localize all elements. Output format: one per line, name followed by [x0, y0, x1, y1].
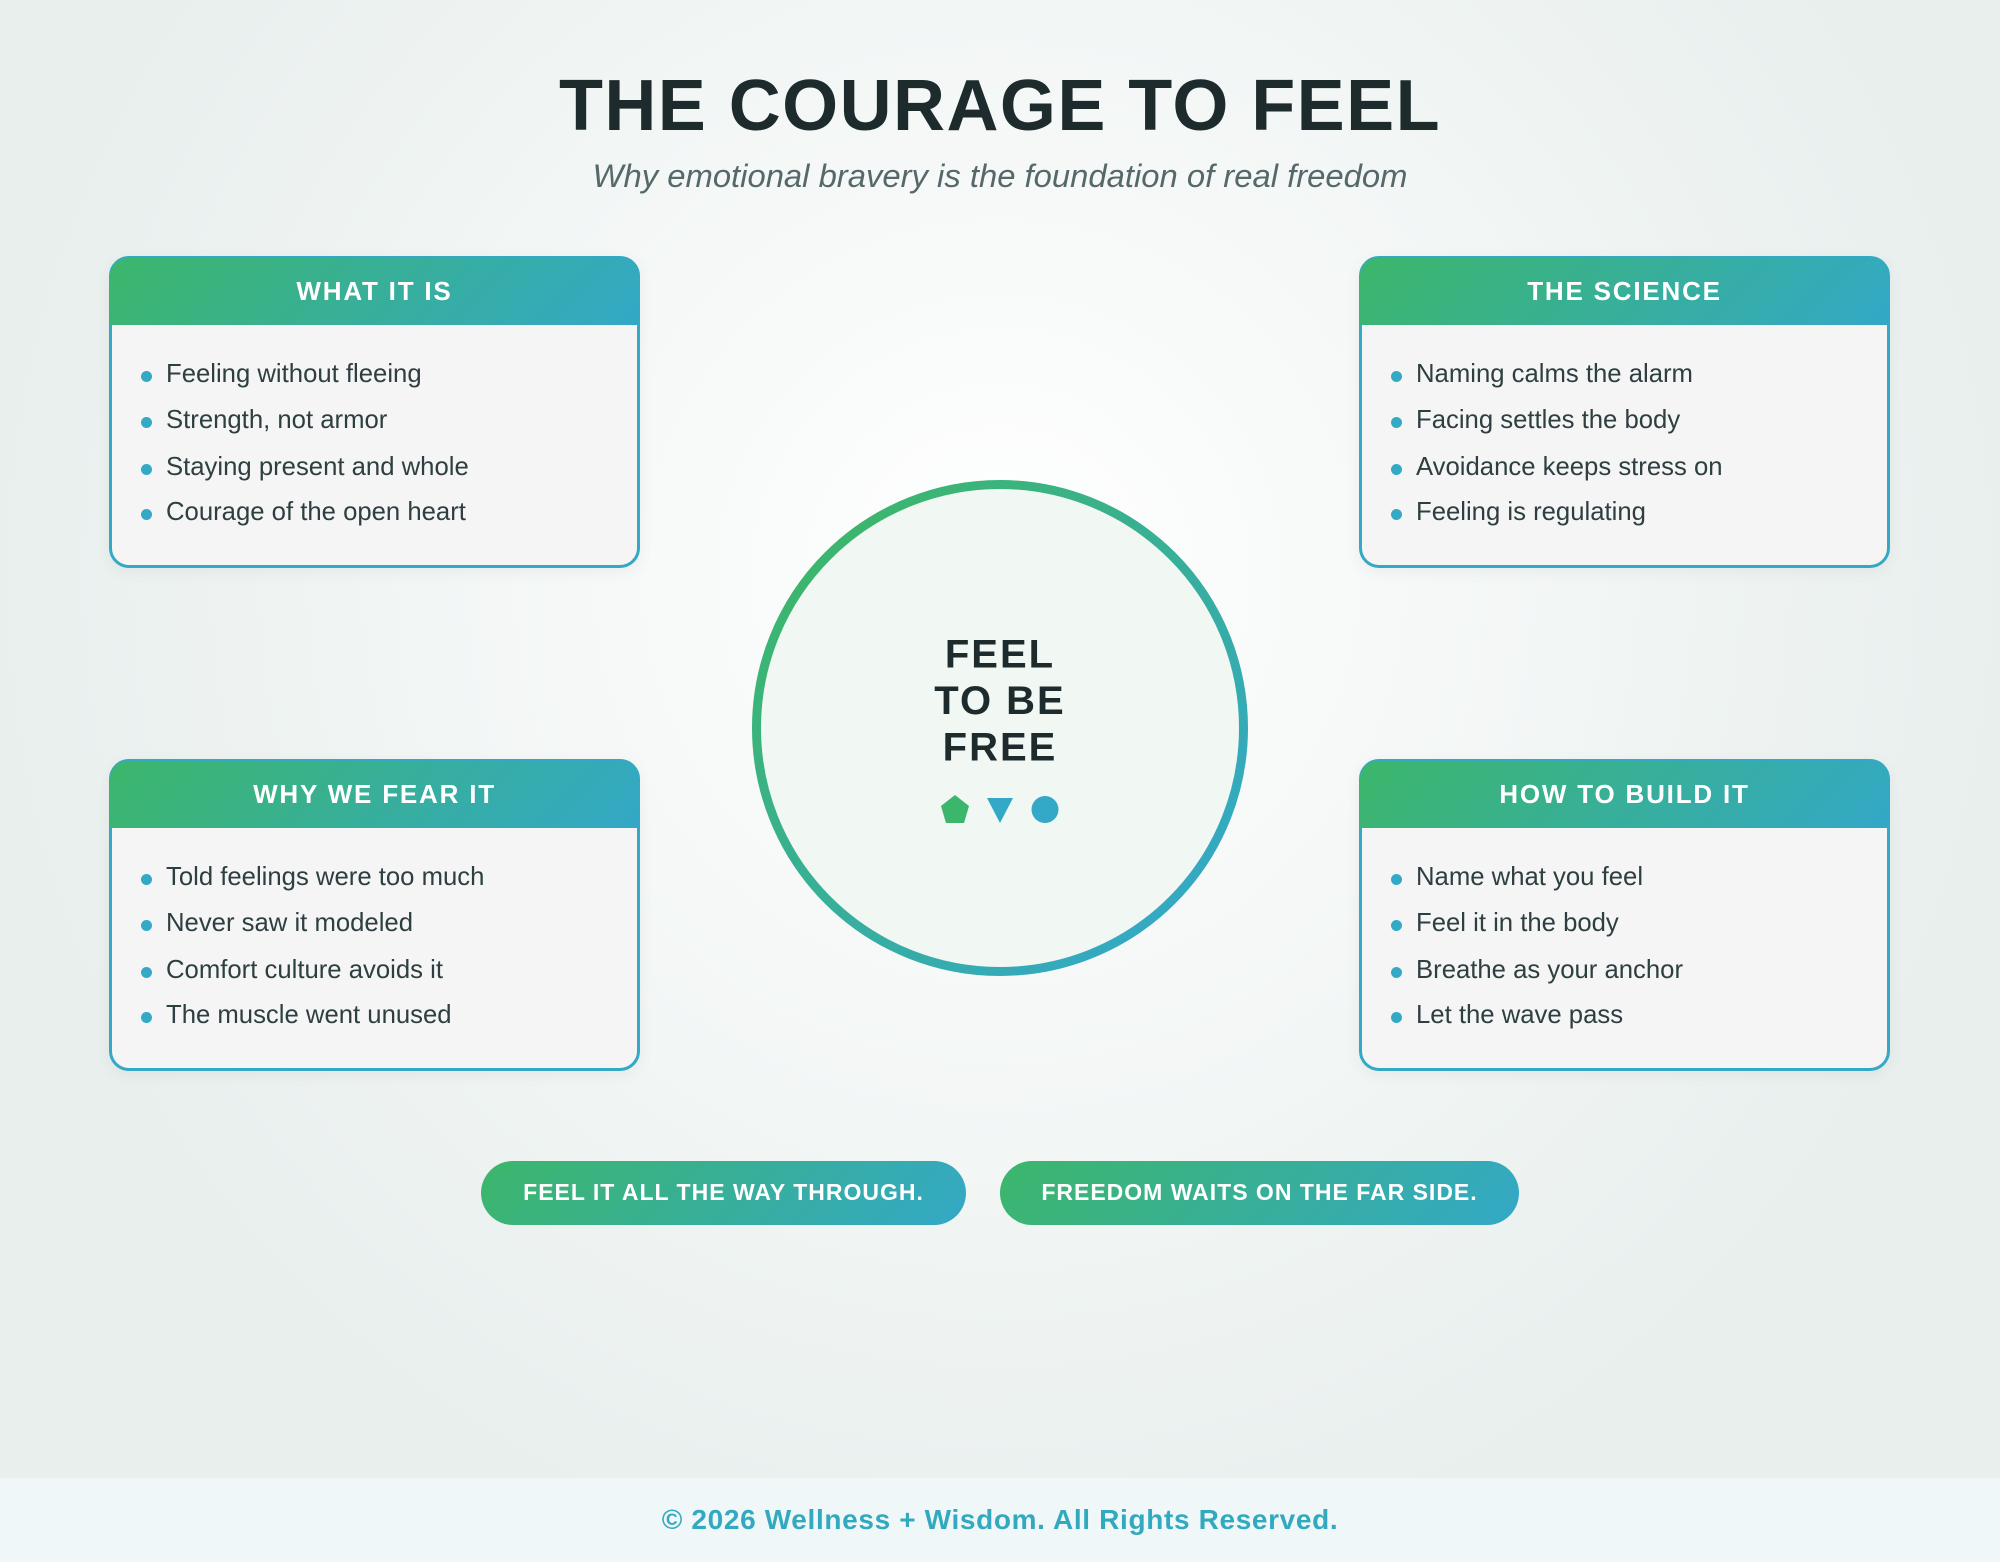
- panel heading: what it is: [110, 258, 639, 325]
- callout pill: freedom waits: FREEDOM WAITS ON THE FAR SIDE.: [1041, 1179, 1478, 1205]
- panel: the science: [1359, 256, 1890, 568]
- central circle: FREE: [943, 726, 1057, 770]
- list item: Facing settles the body: [1416, 406, 1680, 434]
- callout pill: freedom waits: [1000, 1161, 1519, 1225]
- panel heading: the science: [1360, 258, 1889, 325]
- list item: Told feelings were too much: [166, 863, 484, 891]
- list item: Feeling is regulating: [1416, 498, 1646, 526]
- panel heading: how to build it: HOW TO BUILD IT: [1499, 779, 1750, 809]
- circle text: FEEL: [945, 632, 1055, 676]
- panel heading: why we fear it: WHY WE FEAR IT: [253, 779, 496, 809]
- list item: Staying present and whole: [166, 453, 469, 481]
- list item: Breathe as your anchor: [1416, 956, 1683, 984]
- icon: circle: [1032, 796, 1058, 823]
- list item: Avoidance keeps stress on: [1416, 453, 1723, 481]
- list item: Feeling without fleeing: [166, 360, 422, 388]
- panel heading: what it is: WHAT IT IS: [296, 276, 453, 306]
- footer: © 2026 Wellness + Wisdom. All Rights Reserved.: [662, 1504, 1338, 1535]
- subtitle: Why emotional bravery is the foundation of real freedom: [593, 157, 1407, 194]
- icon: pentagon: [941, 795, 969, 823]
- icon: triangle: [987, 798, 1013, 823]
- list item: Name what you feel: [1416, 863, 1643, 891]
- panel: how to build it: [1359, 759, 1890, 1071]
- panel: what it is: [109, 256, 640, 568]
- central circle: TO BE: [934, 679, 1066, 723]
- footer: [0, 1478, 2000, 1562]
- central circle: [752, 480, 1248, 976]
- list item: The muscle went unused: [166, 1001, 452, 1029]
- callout pill: feel it all the way through: FEEL IT ALL THE WAY THROUGH.: [523, 1179, 924, 1205]
- title: THE COURAGE TO FEEL: [559, 66, 1441, 146]
- list item: Let the wave pass: [1416, 1001, 1623, 1029]
- panel heading: why we fear it: [110, 761, 639, 828]
- panel: why we fear it: [109, 759, 640, 1071]
- list item: Comfort culture avoids it: [166, 956, 443, 984]
- list item: Naming calms the alarm: [1416, 360, 1693, 388]
- panel heading: how to build it: [1360, 761, 1889, 828]
- list item: Feel it in the body: [1416, 909, 1619, 937]
- list item: Strength, not armor: [166, 406, 387, 434]
- callout pill: feel it all the way through: [481, 1161, 966, 1225]
- panel heading: the science: THE SCIENCE: [1527, 276, 1722, 306]
- list item: Never saw it modeled: [166, 909, 413, 937]
- list item: Courage of the open heart: [166, 498, 466, 526]
